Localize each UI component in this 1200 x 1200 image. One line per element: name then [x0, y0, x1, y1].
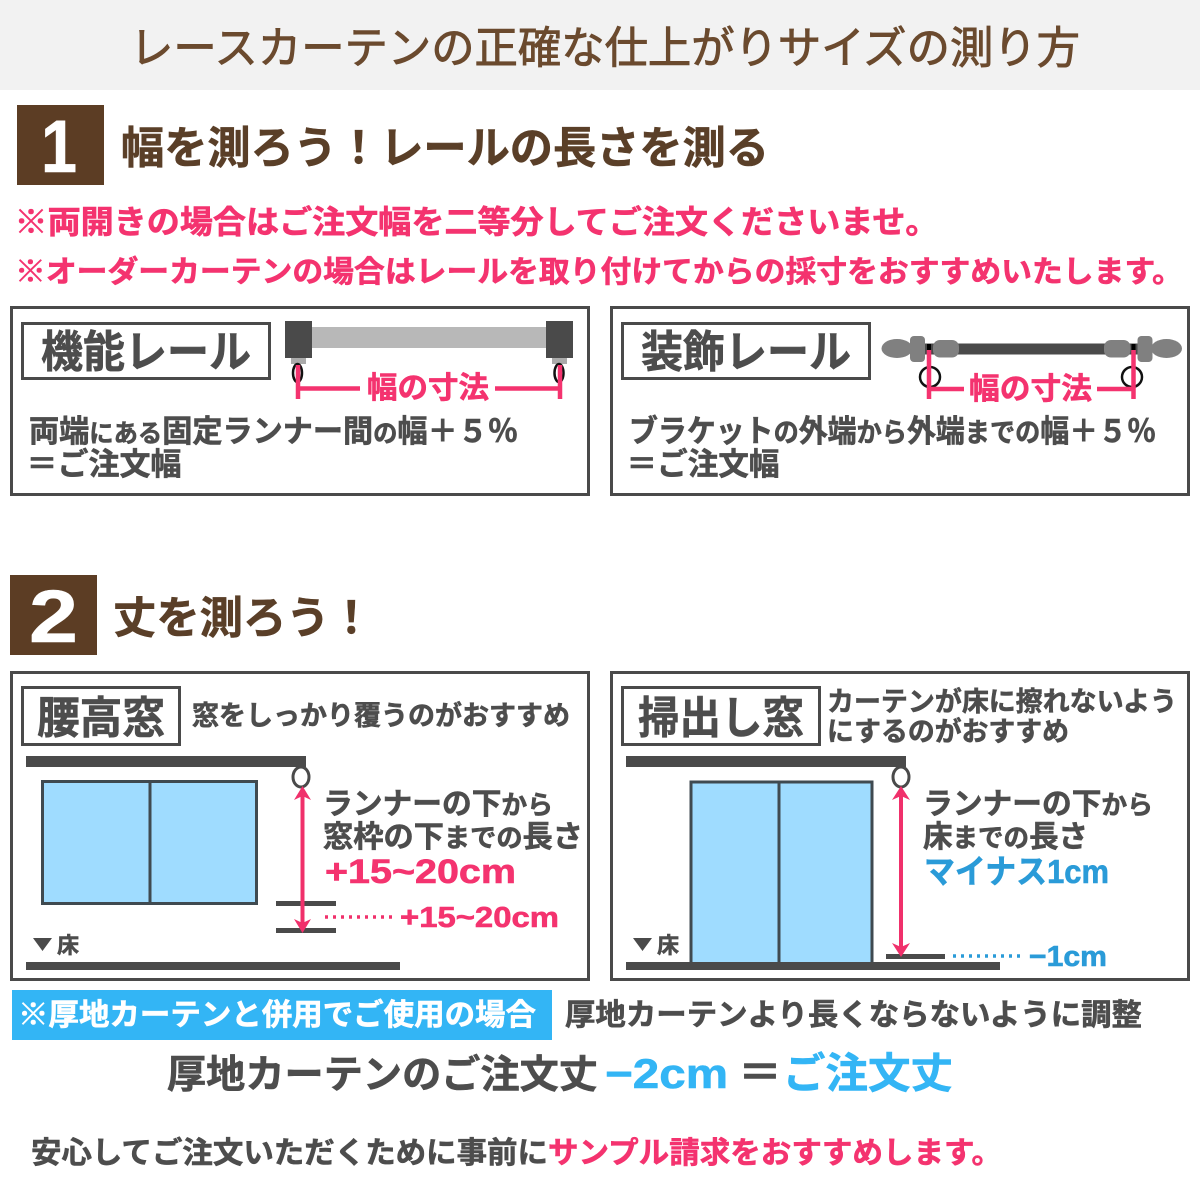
description: functional rail: ＝ご注文幅 — [26, 447, 182, 482]
measurement instructions — [923, 788, 1153, 973]
measurement instructions: −1cm — [1029, 941, 1107, 973]
recommendation text: にするのがおすすめ — [827, 716, 1069, 747]
panel: functional rail — [12, 308, 588, 494]
window diagram: 床 — [57, 933, 79, 958]
callout: use with thick curtains: ※厚地カーテンと併用でご使用の場合 — [18, 998, 536, 1032]
rail diagram: functional rail: 幅の寸法 — [367, 372, 489, 405]
label: floor-length window: 掃出し窓 — [638, 694, 804, 743]
window diagram — [626, 756, 1000, 970]
description: decorative rail: ＝ご注文幅 — [626, 447, 780, 482]
description: decorative rail: ブラケットの外端から外端までの幅＋５％ — [629, 414, 1156, 449]
measurement instructions: +15~20cm — [400, 902, 559, 934]
measurement instructions: 床までの長さ — [923, 821, 1088, 854]
window diagram: 床 — [657, 933, 679, 958]
description: functional rail: 両端にある固定ランナー間の幅＋５％ — [29, 414, 518, 449]
panel: waist-height window — [12, 672, 588, 980]
notes in pink: ※両開きの場合はご注文幅を二等分してご注文くださいませ。 — [14, 204, 938, 240]
rail diagram: functional rail — [285, 321, 573, 405]
formula: ご注文丈 — [783, 1050, 953, 1097]
panel: decorative rail — [612, 308, 1188, 494]
callout: use with thick curtains — [12, 990, 1142, 1040]
description: decorative rail — [626, 414, 1156, 482]
panel: floor-length window — [612, 672, 1188, 980]
measurement instructions: 窓枠の下までの長さ — [323, 821, 583, 854]
rail diagram: decorative rail: 幅の寸法 — [969, 373, 1092, 406]
recommendation text: 窓をしっかり覆うのがおすすめ — [192, 700, 570, 731]
label: decorative rail: 装飾レール — [641, 328, 851, 377]
title banner: レースカーテンの正確な仕上がりサイズの測り方 — [130, 24, 1080, 73]
recommendation text: カーテンが床に擦れないよう — [827, 686, 1177, 717]
recommendation text — [827, 686, 1177, 747]
formula: 厚地カーテンのご注文丈 — [167, 1054, 598, 1097]
window diagram — [26, 756, 400, 970]
rail diagram: decorative rail — [882, 336, 1182, 406]
closing note: サンプル請求をおすすめします。 — [548, 1137, 1002, 1170]
step 1 heading: 幅を測ろう！レールの長さを測る — [121, 124, 769, 173]
formula: −2cm — [605, 1050, 728, 1097]
notes in pink: ※オーダーカーテンの場合はレールを取り付けてからの採寸をおすすめいたします。 — [15, 255, 1183, 289]
notes in pink — [14, 204, 1183, 289]
measurement instructions: ランナーの下から — [323, 788, 553, 821]
step 2 heading: 2 — [29, 575, 78, 658]
step 2 heading — [10, 575, 373, 658]
step 2 heading: 丈を測ろう！ — [113, 594, 373, 643]
measurement instructions: ランナーの下から — [923, 788, 1153, 821]
formula — [167, 1049, 953, 1098]
measurement instructions: マイナス1cm — [924, 853, 1109, 890]
measurement instructions — [323, 788, 583, 934]
callout: use with thick curtains: 厚地カーテンより長くならないように調整 — [565, 999, 1142, 1032]
measurement instructions: +15~20cm — [325, 853, 516, 891]
step 1 heading: 1 — [41, 105, 77, 188]
label: functional rail: 機能レール — [41, 328, 251, 377]
description: functional rail — [26, 414, 518, 482]
title banner — [0, 0, 1200, 90]
step 1 heading — [17, 105, 769, 188]
closing note: 安心してご注文いただくために事前に — [31, 1136, 548, 1170]
label: waist-height window: 腰高窓 — [37, 694, 165, 743]
closing note — [31, 1136, 1002, 1170]
formula: ＝ — [738, 1049, 782, 1098]
